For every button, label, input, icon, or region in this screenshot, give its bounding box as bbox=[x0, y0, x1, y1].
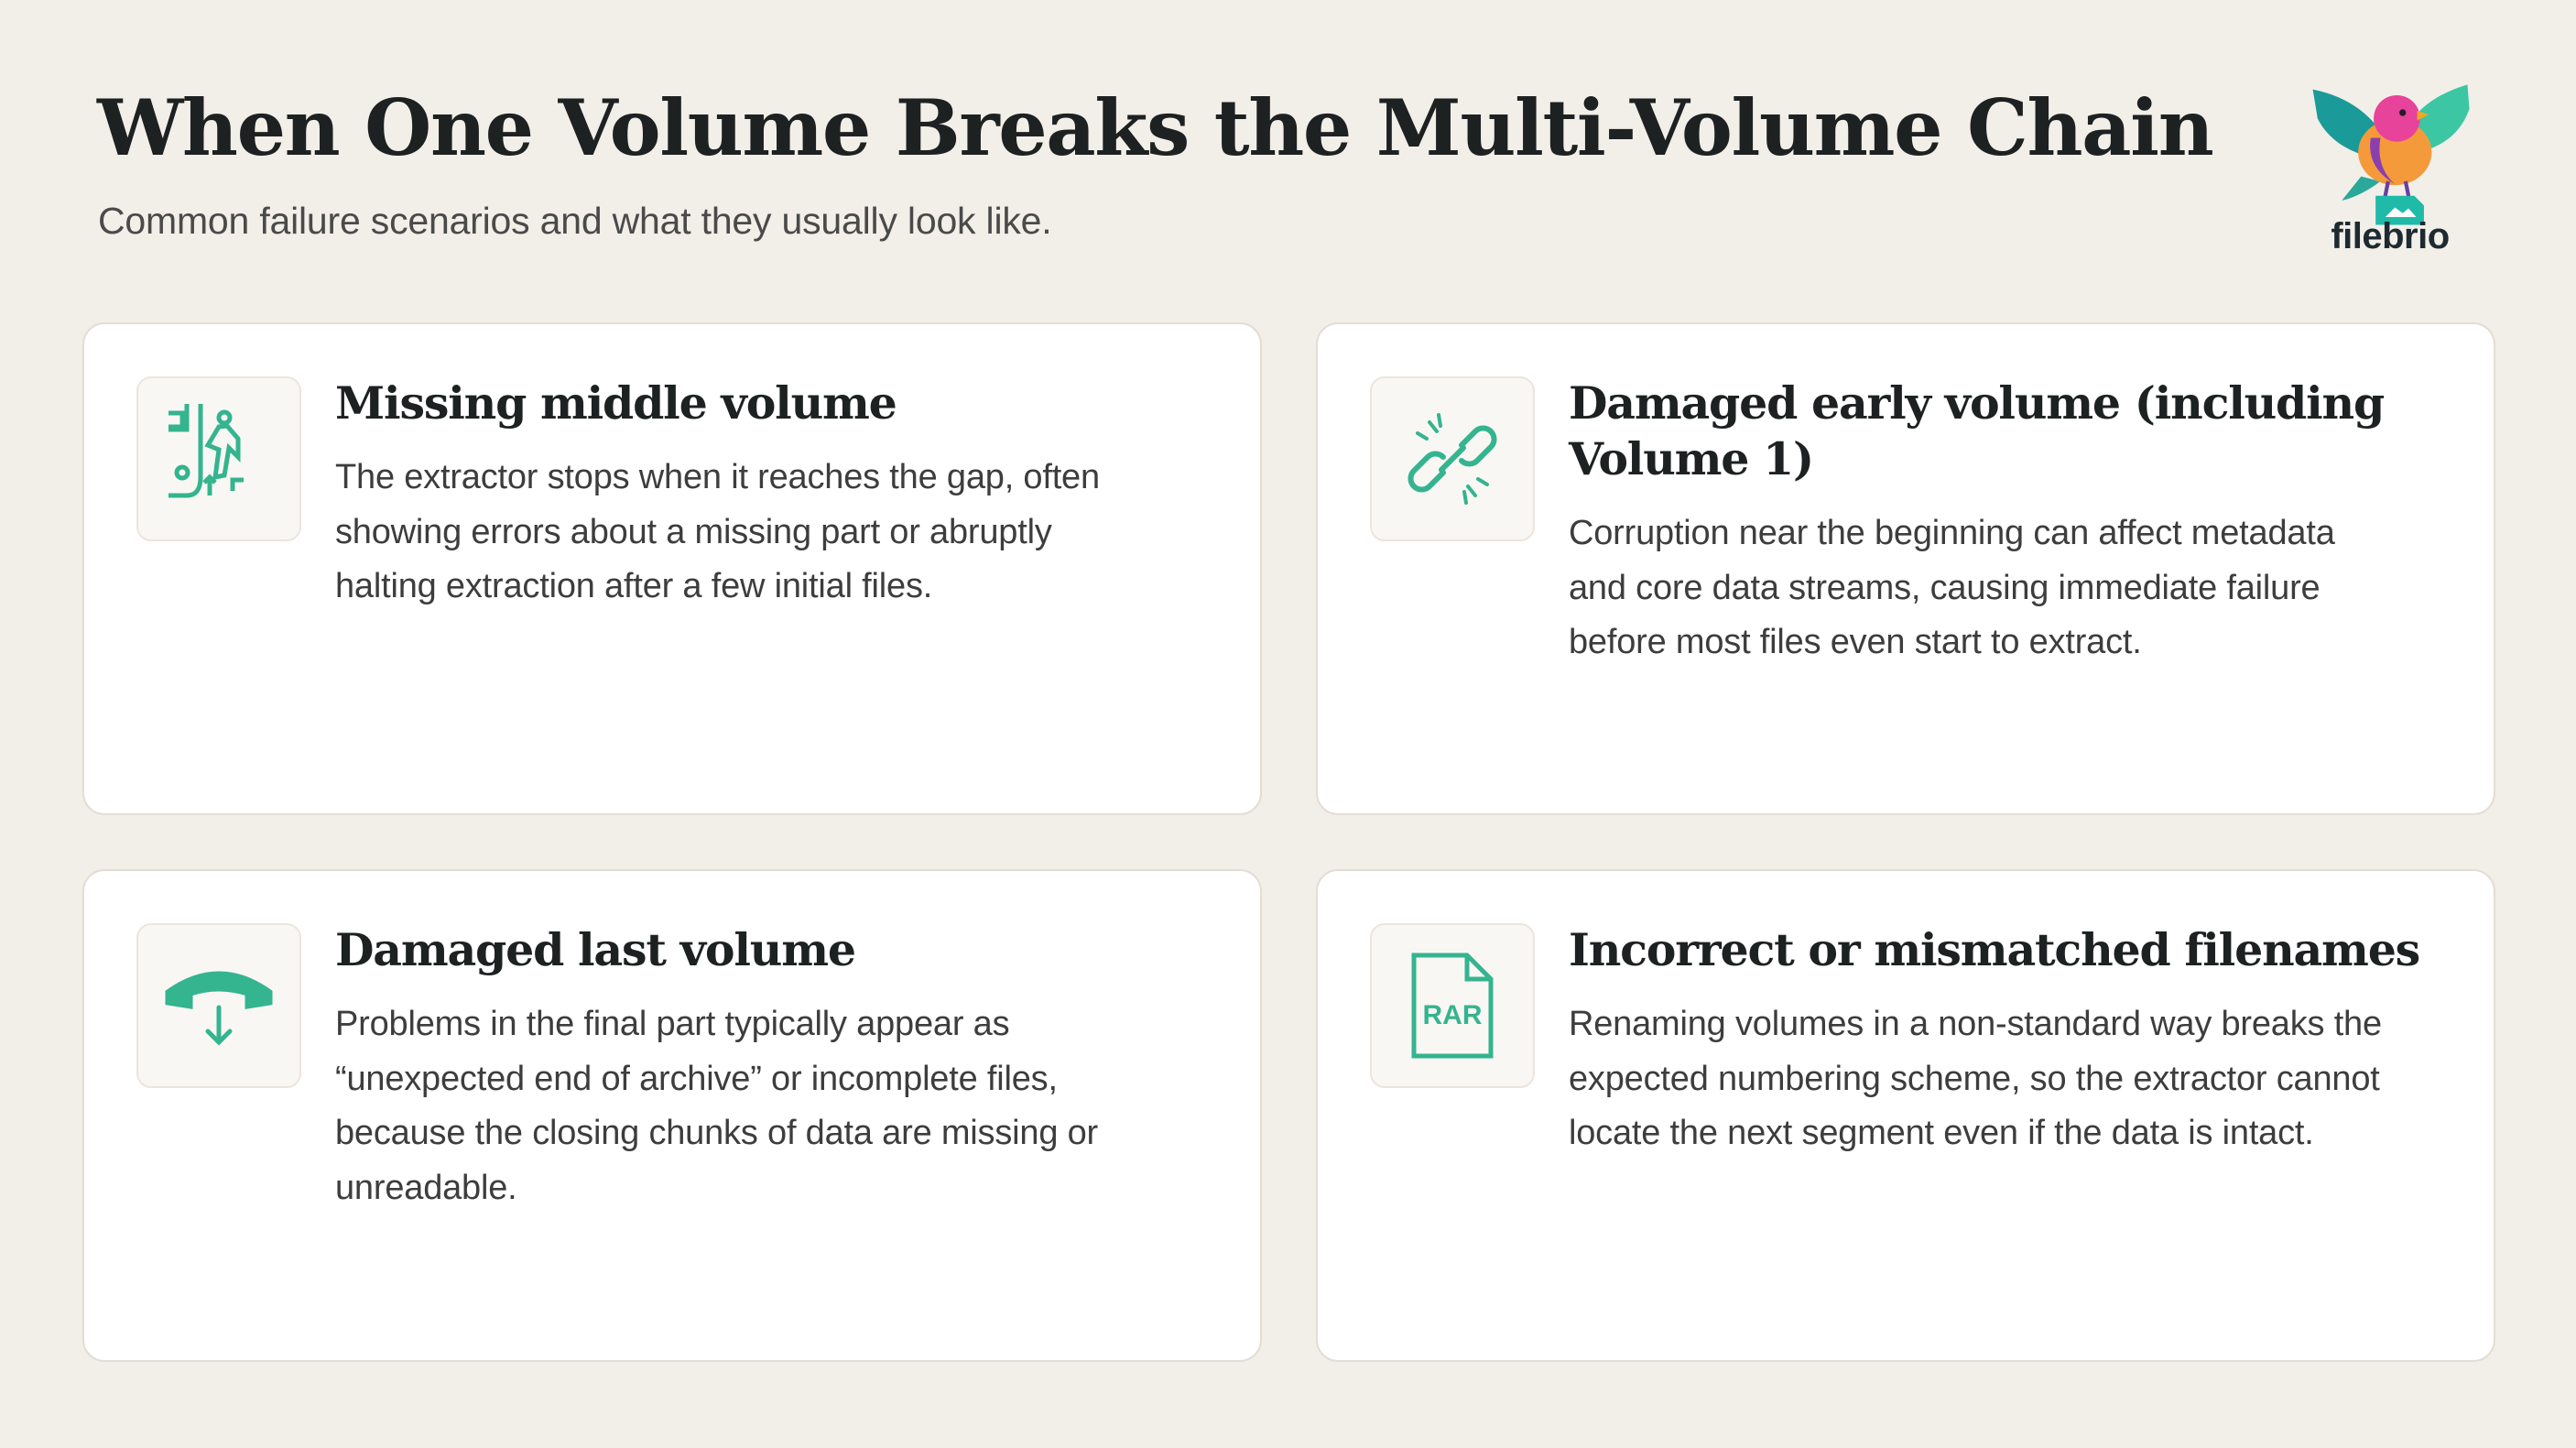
body text: “unexpected end of archive” or incomplete files, bbox=[335, 1059, 1058, 1097]
heading bbox=[1568, 376, 2385, 485]
body text: The extractor stops when it reaches the gap, often bbox=[335, 458, 1100, 496]
body text: showing errors about a missing part or abruptly bbox=[335, 513, 1052, 551]
body text: locate the next segment even if the data is intact. bbox=[1569, 1114, 2314, 1152]
heading: Damaged last volume bbox=[335, 923, 855, 976]
heading: Damaged early volume (including bbox=[1569, 376, 2384, 430]
heading: Incorrect or mismatched filenames bbox=[1569, 923, 2419, 976]
logo: filebrio bbox=[2313, 84, 2470, 256]
body text: Corruption near the beginning can affect metadata bbox=[1569, 514, 2335, 552]
body text bbox=[1569, 514, 2335, 661]
body text: unreadable. bbox=[335, 1169, 517, 1207]
icon: broken link bbox=[1370, 376, 1535, 541]
icon: RAR file: RAR bbox=[1423, 1000, 1483, 1030]
icon: person walking out door bbox=[136, 376, 301, 541]
body text: halting extraction after a few initial files. bbox=[335, 567, 932, 605]
panel: damaged last volume bbox=[82, 869, 1262, 1362]
body text: because the closing chunks of data are missing or bbox=[335, 1114, 1098, 1152]
body text bbox=[335, 1005, 1098, 1207]
panel: damaged early volume bbox=[1316, 322, 2495, 815]
body text: before most files even start to extract. bbox=[1569, 623, 2142, 661]
body text bbox=[335, 458, 1100, 605]
body text bbox=[1569, 1005, 2382, 1152]
panel: incorrect filenames bbox=[1316, 869, 2495, 1362]
body text: and core data streams, causing immediate failure bbox=[1569, 568, 2320, 606]
body text: Renaming volumes in a non-standard way breaks the bbox=[1569, 1005, 2382, 1043]
body text: Problems in the final part typically appear as bbox=[335, 1005, 1009, 1043]
subtitle: Common failure scenarios and what they usually look like. bbox=[98, 200, 1051, 242]
title: When One Volume Breaks the Multi-Volume Chain bbox=[97, 82, 2212, 173]
heading: Volume 1) bbox=[1569, 432, 1813, 485]
logo: filebrio: filebrio bbox=[2331, 216, 2450, 256]
heading: Missing middle volume bbox=[335, 376, 897, 430]
icon: phone hang up with arrow bbox=[136, 923, 301, 1088]
body text: expected numbering scheme, so the extractor cannot bbox=[1569, 1059, 2380, 1097]
icon: RAR file bbox=[1370, 923, 1535, 1088]
panel: missing middle volume bbox=[82, 322, 1262, 815]
